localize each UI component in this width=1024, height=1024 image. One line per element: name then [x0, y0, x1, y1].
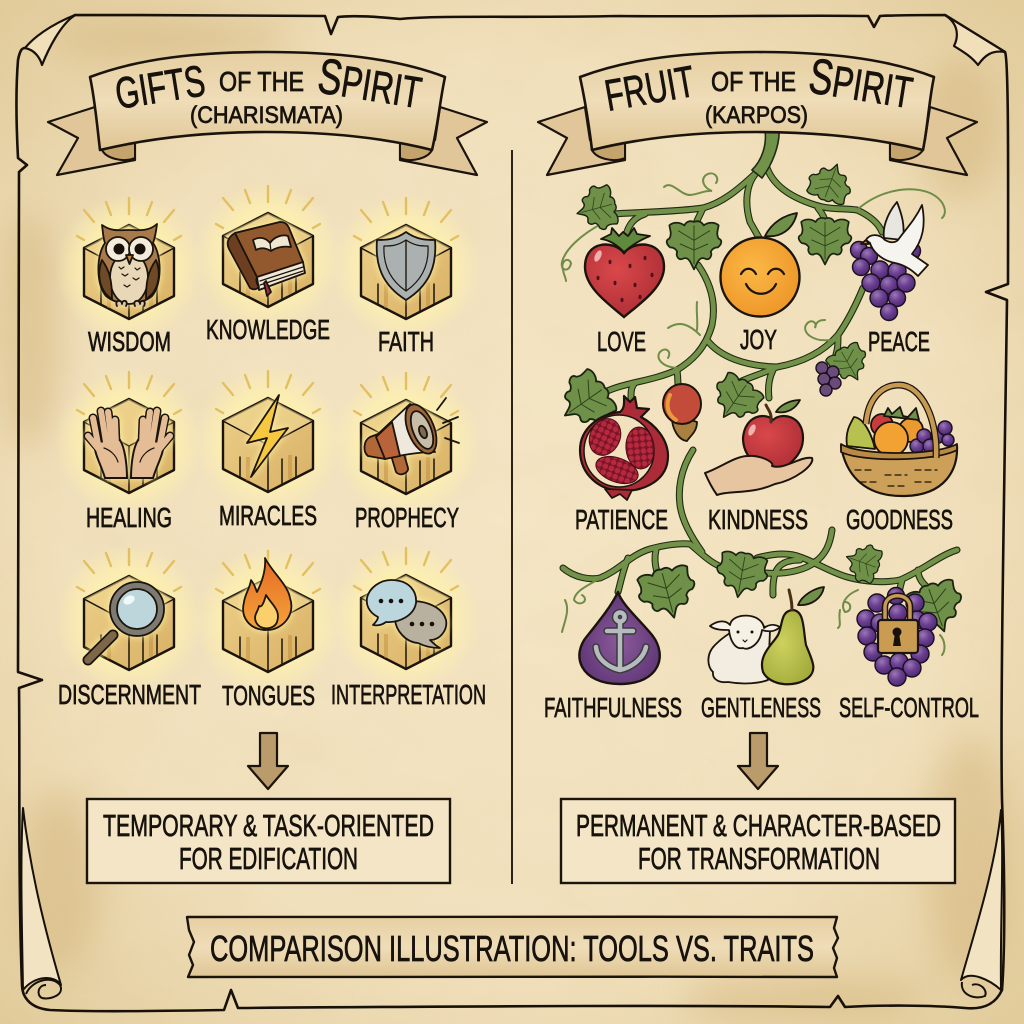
banner title: gifts: SPIRIT — [314, 48, 426, 119]
banner title: gifts: GIFTS — [112, 56, 208, 119]
label: peace: PEACE — [868, 326, 930, 357]
tendrils — [562, 173, 945, 655]
callout: temporary and task-oriented: FOR EDIFICATION — [179, 841, 358, 876]
label: prophecy: PROPHECY — [355, 502, 459, 533]
callout: temporary and task-oriented: TEMPORARY & TASK-ORIENTED — [103, 808, 434, 843]
label: kindness: KINDNESS — [708, 504, 808, 535]
pomegranate seeds — [583, 413, 656, 489]
fruit: kindness apple in hand — [705, 400, 812, 495]
thick stem from banner — [752, 130, 779, 178]
basket contents — [847, 407, 954, 456]
gift: knowledge book — [194, 182, 342, 330]
callout: permanent and character-based: FOR TRANSFORMATION — [638, 841, 880, 876]
arrow: fruit down — [738, 733, 778, 789]
banner: fruit — [538, 48, 977, 175]
fruit: joy smiling orange — [720, 213, 800, 316]
label: tongues: TONGUES — [222, 680, 315, 711]
bottom-left scroll curl — [21, 808, 61, 990]
icon: anchor — [596, 612, 646, 670]
fruit: peace grapes with dove — [850, 202, 928, 320]
grape cluster: peace — [850, 242, 920, 320]
icon: apple — [743, 416, 803, 470]
label: faithfulness: FAITHFULNESS — [544, 692, 682, 723]
fruit: faithfulness fig with anchor — [579, 592, 660, 684]
gift: interpretation speech bubbles — [332, 544, 480, 692]
banner title: gifts — [112, 48, 426, 129]
fruit: goodness basket — [841, 385, 957, 496]
icon: padlock — [878, 596, 918, 653]
gift: healing hands — [55, 368, 203, 516]
label: miracles: MIRACLES — [219, 500, 317, 531]
panel: gifts of the spirit — [48, 48, 487, 883]
basket handle — [866, 385, 936, 458]
banner: gifts — [48, 48, 487, 175]
icon: dove — [861, 202, 928, 276]
label: faith: FAITH — [378, 326, 434, 357]
vine network — [562, 130, 957, 655]
gift: faith shield — [332, 194, 480, 342]
label: patience: PATIENCE — [575, 504, 668, 535]
bottom-right scroll curl — [961, 810, 1002, 990]
label: knowledge: KNOWLEDGE — [206, 314, 330, 345]
center divider line — [511, 150, 513, 884]
vine leaves — [549, 157, 970, 641]
bottom banner: comparison illustration — [187, 917, 838, 977]
label: love: LOVE — [597, 326, 646, 357]
callout: permanent and character-based — [561, 799, 955, 883]
label: discernment: DISCERNMENT — [58, 679, 201, 710]
icon: pear — [762, 610, 813, 684]
small pomegranate on vine — [663, 384, 701, 441]
fruit: self-control grapes with padlock — [857, 588, 937, 686]
banner title: fruit: SPIRIT — [805, 48, 917, 119]
small grapes on vine — [816, 362, 841, 396]
gift: wisdom owl — [55, 194, 203, 342]
top-right corner curl — [945, 15, 1005, 65]
label: joy: JOY — [740, 324, 777, 355]
grape cluster: self-control — [857, 588, 937, 686]
icon: open hand — [705, 456, 812, 495]
arrow: gifts down — [248, 733, 288, 789]
banner title: fruit — [601, 48, 917, 129]
fruit: love strawberry heart — [585, 228, 664, 317]
fruit: gentleness lamb and pear — [708, 587, 824, 684]
banner title: fruit: FRUIT — [601, 57, 698, 121]
callout: temporary and task-oriented — [87, 799, 450, 883]
label: wisdom: WISDOM — [88, 326, 171, 357]
label: interpretation: INTERPRETATION — [331, 679, 486, 710]
top-left corner curl — [25, 15, 75, 65]
gift: prophecy megaphone — [332, 369, 480, 517]
panel: fruit of the spirit — [538, 48, 979, 883]
gift: tongues flame — [194, 547, 342, 695]
fruit: patience pomegranate — [580, 396, 668, 500]
gift: miracles lightning bolt — [194, 367, 342, 515]
gift: discernment magnifying glass — [55, 545, 203, 693]
label: healing: HEALING — [86, 502, 172, 533]
banner title: gifts: OF THE — [219, 66, 304, 97]
label: goodness: GOODNESS — [846, 504, 953, 535]
label: gentleness: GENTLENESS — [701, 692, 821, 723]
icon: lamb — [708, 616, 780, 683]
banner title: fruit: OF THE — [711, 66, 796, 97]
banner title: gifts: (CHARISMATA) — [190, 102, 343, 129]
banner title: fruit: (KARPOS) — [705, 102, 808, 129]
